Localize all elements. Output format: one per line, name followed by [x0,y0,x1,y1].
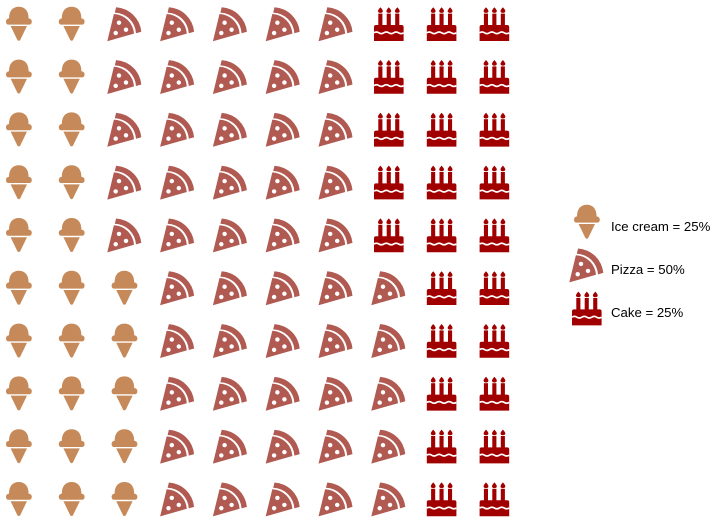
legend icon: cake [572,292,602,325]
legend label: pizza: Pizza = 50% [611,262,685,277]
column 7: pizza icons [318,7,352,516]
column 2: ice cream icons [59,7,85,516]
chart: pictogram grid of 100 food icons [6,7,509,516]
column 4: pizza icons [160,7,194,516]
column 8: cake and pizza icons [371,7,405,516]
column 5: pizza icons [213,7,247,516]
column 3: pizza and ice cream icons [107,7,141,516]
column 6: pizza icons [266,7,300,516]
column 9: cake icons [427,7,456,516]
legend label: cake: Cake = 25% [611,305,683,320]
column 10: cake icons [480,7,509,516]
legend icon: ice cream [574,205,600,239]
legend icon: pizza [569,248,603,282]
legend [569,205,711,325]
legend label: ice cream: Ice cream = 25% [611,219,711,234]
column 1: ice cream icons [6,7,32,516]
